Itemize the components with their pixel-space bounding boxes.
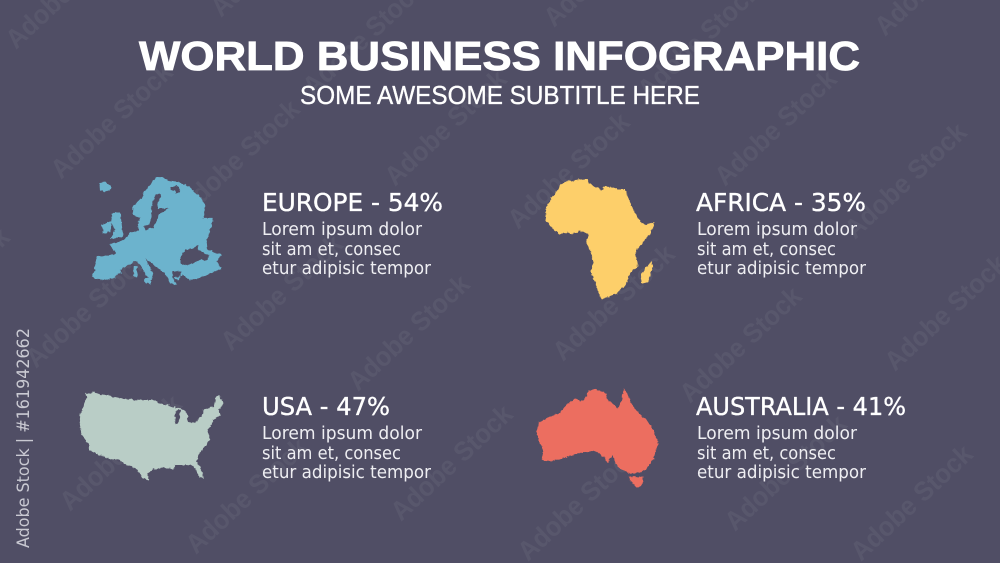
watermark pattern: Adobe Stock [20,245,154,373]
watermark pattern: Adobe Stock [54,388,188,516]
panel: usa [79,392,432,483]
watermark pattern: Adobe Stock [379,63,513,191]
watermark pattern: Adobe Stock [512,438,646,563]
watermark pattern: Adobe Stock [172,93,306,221]
heading: europe: EUROPE - 54% [262,188,443,217]
side credit: Adobe Stock | #161942662 [14,328,34,548]
text: usa body: etur adipisic tempor [262,462,432,483]
heading: usa: USA - 47% [262,392,390,421]
text: africa body: Lorem ipsum dolor [697,219,858,240]
panel: africa [545,179,867,299]
watermark pattern: Adobe Stock [180,431,314,559]
text: usa body [262,423,432,483]
watermark pattern: Adobe Stock [342,268,476,396]
icon: usa map [79,392,224,481]
watermark pattern: Adobe Stock [845,438,979,563]
heading: australia: AUSTRALIA - 41% [696,392,906,421]
text: usa body: Lorem ipsum dolor [262,423,423,444]
watermark pattern: Adobe Stock [502,106,636,234]
text: usa body: sit am et, consec [262,443,401,464]
watermark pattern: Adobe Stock [709,63,843,191]
text: europe body: etur adipisic tempor [262,258,432,279]
watermark pattern: Adobe Stock [45,56,179,184]
text: europe body: sit am et, consec [262,239,401,260]
watermark pattern: Adobe Stock [839,116,973,244]
heading: africa: AFRICA - 35% [696,188,866,217]
text: europe body: Lorem ipsum dolor [262,219,423,240]
panel: europe [92,178,443,285]
icon: europe map [92,178,222,285]
text: africa body: etur adipisic tempor [697,258,867,279]
watermark pattern: Adobe Stock [674,280,808,408]
watermark pattern: Adobe Stock [385,398,519,526]
text: europe body [262,219,432,279]
icon: africa map [545,179,655,299]
panel: australia [537,388,906,488]
subtitle: SOME AWESOME SUBTITLE HERE [300,80,700,110]
title: WORLD BUSINESS INFOGRAPHIC [139,33,860,79]
text: australia body: Lorem ipsum dolor [697,423,858,444]
text: australia body [697,423,867,483]
text: australia body: etur adipisic tempor [697,462,867,483]
icon: australia map [537,388,658,488]
watermark pattern: Adobe Stock [719,408,853,536]
text: africa body: sit am et, consec [697,239,836,260]
text: africa body [697,219,867,279]
text: australia body: sit am et, consec [697,443,836,464]
watermark pattern: Adobe Stock [547,238,681,366]
watermark pattern: Adobe Stock [215,228,349,356]
